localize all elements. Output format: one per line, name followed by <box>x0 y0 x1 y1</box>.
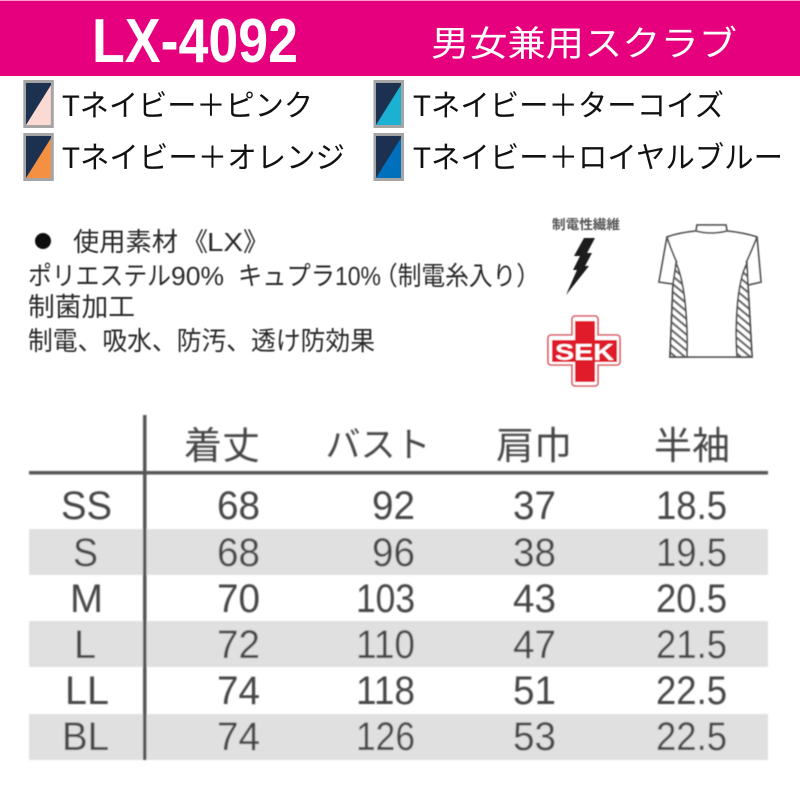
material heading <box>73 227 269 257</box>
header banner <box>0 0 800 76</box>
sleeve column: 22.5 <box>656 715 727 759</box>
row shading <box>29 529 768 760</box>
colour option: navy and royal blue <box>375 134 783 180</box>
length column: 72 <box>217 623 260 667</box>
size table <box>29 415 768 760</box>
material heading: 》 <box>243 227 269 257</box>
row labels: SS <box>61 484 112 528</box>
bust column: 110 <box>356 623 415 667</box>
fibre composition: キュプラ <box>238 261 335 291</box>
bullet <box>35 233 51 249</box>
length column: 68 <box>217 484 260 528</box>
table rules <box>29 415 768 760</box>
row labels: LL <box>65 669 109 713</box>
row labels: BL <box>62 715 109 759</box>
colour option: navy and turquoise: Tネイビー＋ターコイズ <box>413 90 724 123</box>
material heading: 《 <box>182 227 208 257</box>
fibre composition <box>28 261 540 291</box>
column headers: バスト <box>325 426 431 465</box>
column headers: 着丈 <box>184 426 260 468</box>
bust column <box>356 484 415 759</box>
column headers: 半袖 <box>654 426 730 468</box>
material description <box>28 227 540 356</box>
sleeve column: 18.5 <box>656 484 727 528</box>
sleeve column: 19.5 <box>656 531 727 575</box>
shoulder column: 37 <box>513 484 556 528</box>
shoulder column: 53 <box>513 715 556 759</box>
length column: 74 <box>217 669 260 713</box>
row labels: S <box>73 531 98 575</box>
product type: 男女兼用スクラブ <box>431 25 737 64</box>
bust column: 92 <box>372 484 415 528</box>
bust column: 126 <box>356 715 415 759</box>
product code: LX-4092 <box>92 7 298 76</box>
shoulder column: 43 <box>513 577 556 621</box>
column headers: 肩巾 <box>496 426 572 468</box>
row labels: L <box>74 623 96 667</box>
fibre composition: 90% <box>171 261 224 291</box>
garment back diagram <box>659 225 761 357</box>
fibre composition: （制電糸入り） <box>374 261 540 291</box>
colour option: navy and pink: Tネイビー＋ピンク <box>62 90 313 123</box>
bust column: 118 <box>356 669 415 713</box>
fibre composition: ポリエステル <box>28 261 171 291</box>
shoulder column: 51 <box>513 669 556 713</box>
colour option: navy and royal blue: Tネイビー＋ロイヤルブルー <box>413 142 783 175</box>
length column: 70 <box>217 577 260 621</box>
column headers <box>184 426 730 468</box>
fibre composition: 10% <box>335 261 381 291</box>
colour option: navy and orange: Tネイビー＋オレンジ <box>62 142 345 175</box>
length column: 74 <box>217 715 260 759</box>
SEK mark icon <box>548 316 620 386</box>
sleeve column: 22.5 <box>656 669 727 713</box>
bust column: 96 <box>372 531 415 575</box>
shoulder column <box>513 484 556 759</box>
row labels <box>61 484 112 759</box>
colour option: navy and orange <box>25 134 345 180</box>
length column <box>217 484 260 759</box>
SEK mark icon: SEK <box>555 339 614 365</box>
material heading: 使用素材 <box>73 227 178 257</box>
colour option: navy and pink <box>25 82 313 126</box>
shoulder column: 47 <box>513 623 556 667</box>
material description: 制菌加工 <box>28 292 135 322</box>
antistatic fibre icon: 制電性繊維 <box>552 217 620 232</box>
sleeve column: 20.5 <box>656 577 727 621</box>
sleeve column <box>656 484 727 759</box>
bust column: 103 <box>356 577 415 621</box>
colour option: navy and turquoise <box>375 82 724 126</box>
sleeve column: 21.5 <box>656 623 727 667</box>
material heading: LX <box>207 227 243 257</box>
antistatic fibre icon <box>552 217 620 295</box>
shoulder column: 38 <box>513 531 556 575</box>
length column: 68 <box>217 531 260 575</box>
row labels: M <box>70 577 103 621</box>
material description: 制電、吸水、防汚、透け防効果 <box>28 326 375 356</box>
